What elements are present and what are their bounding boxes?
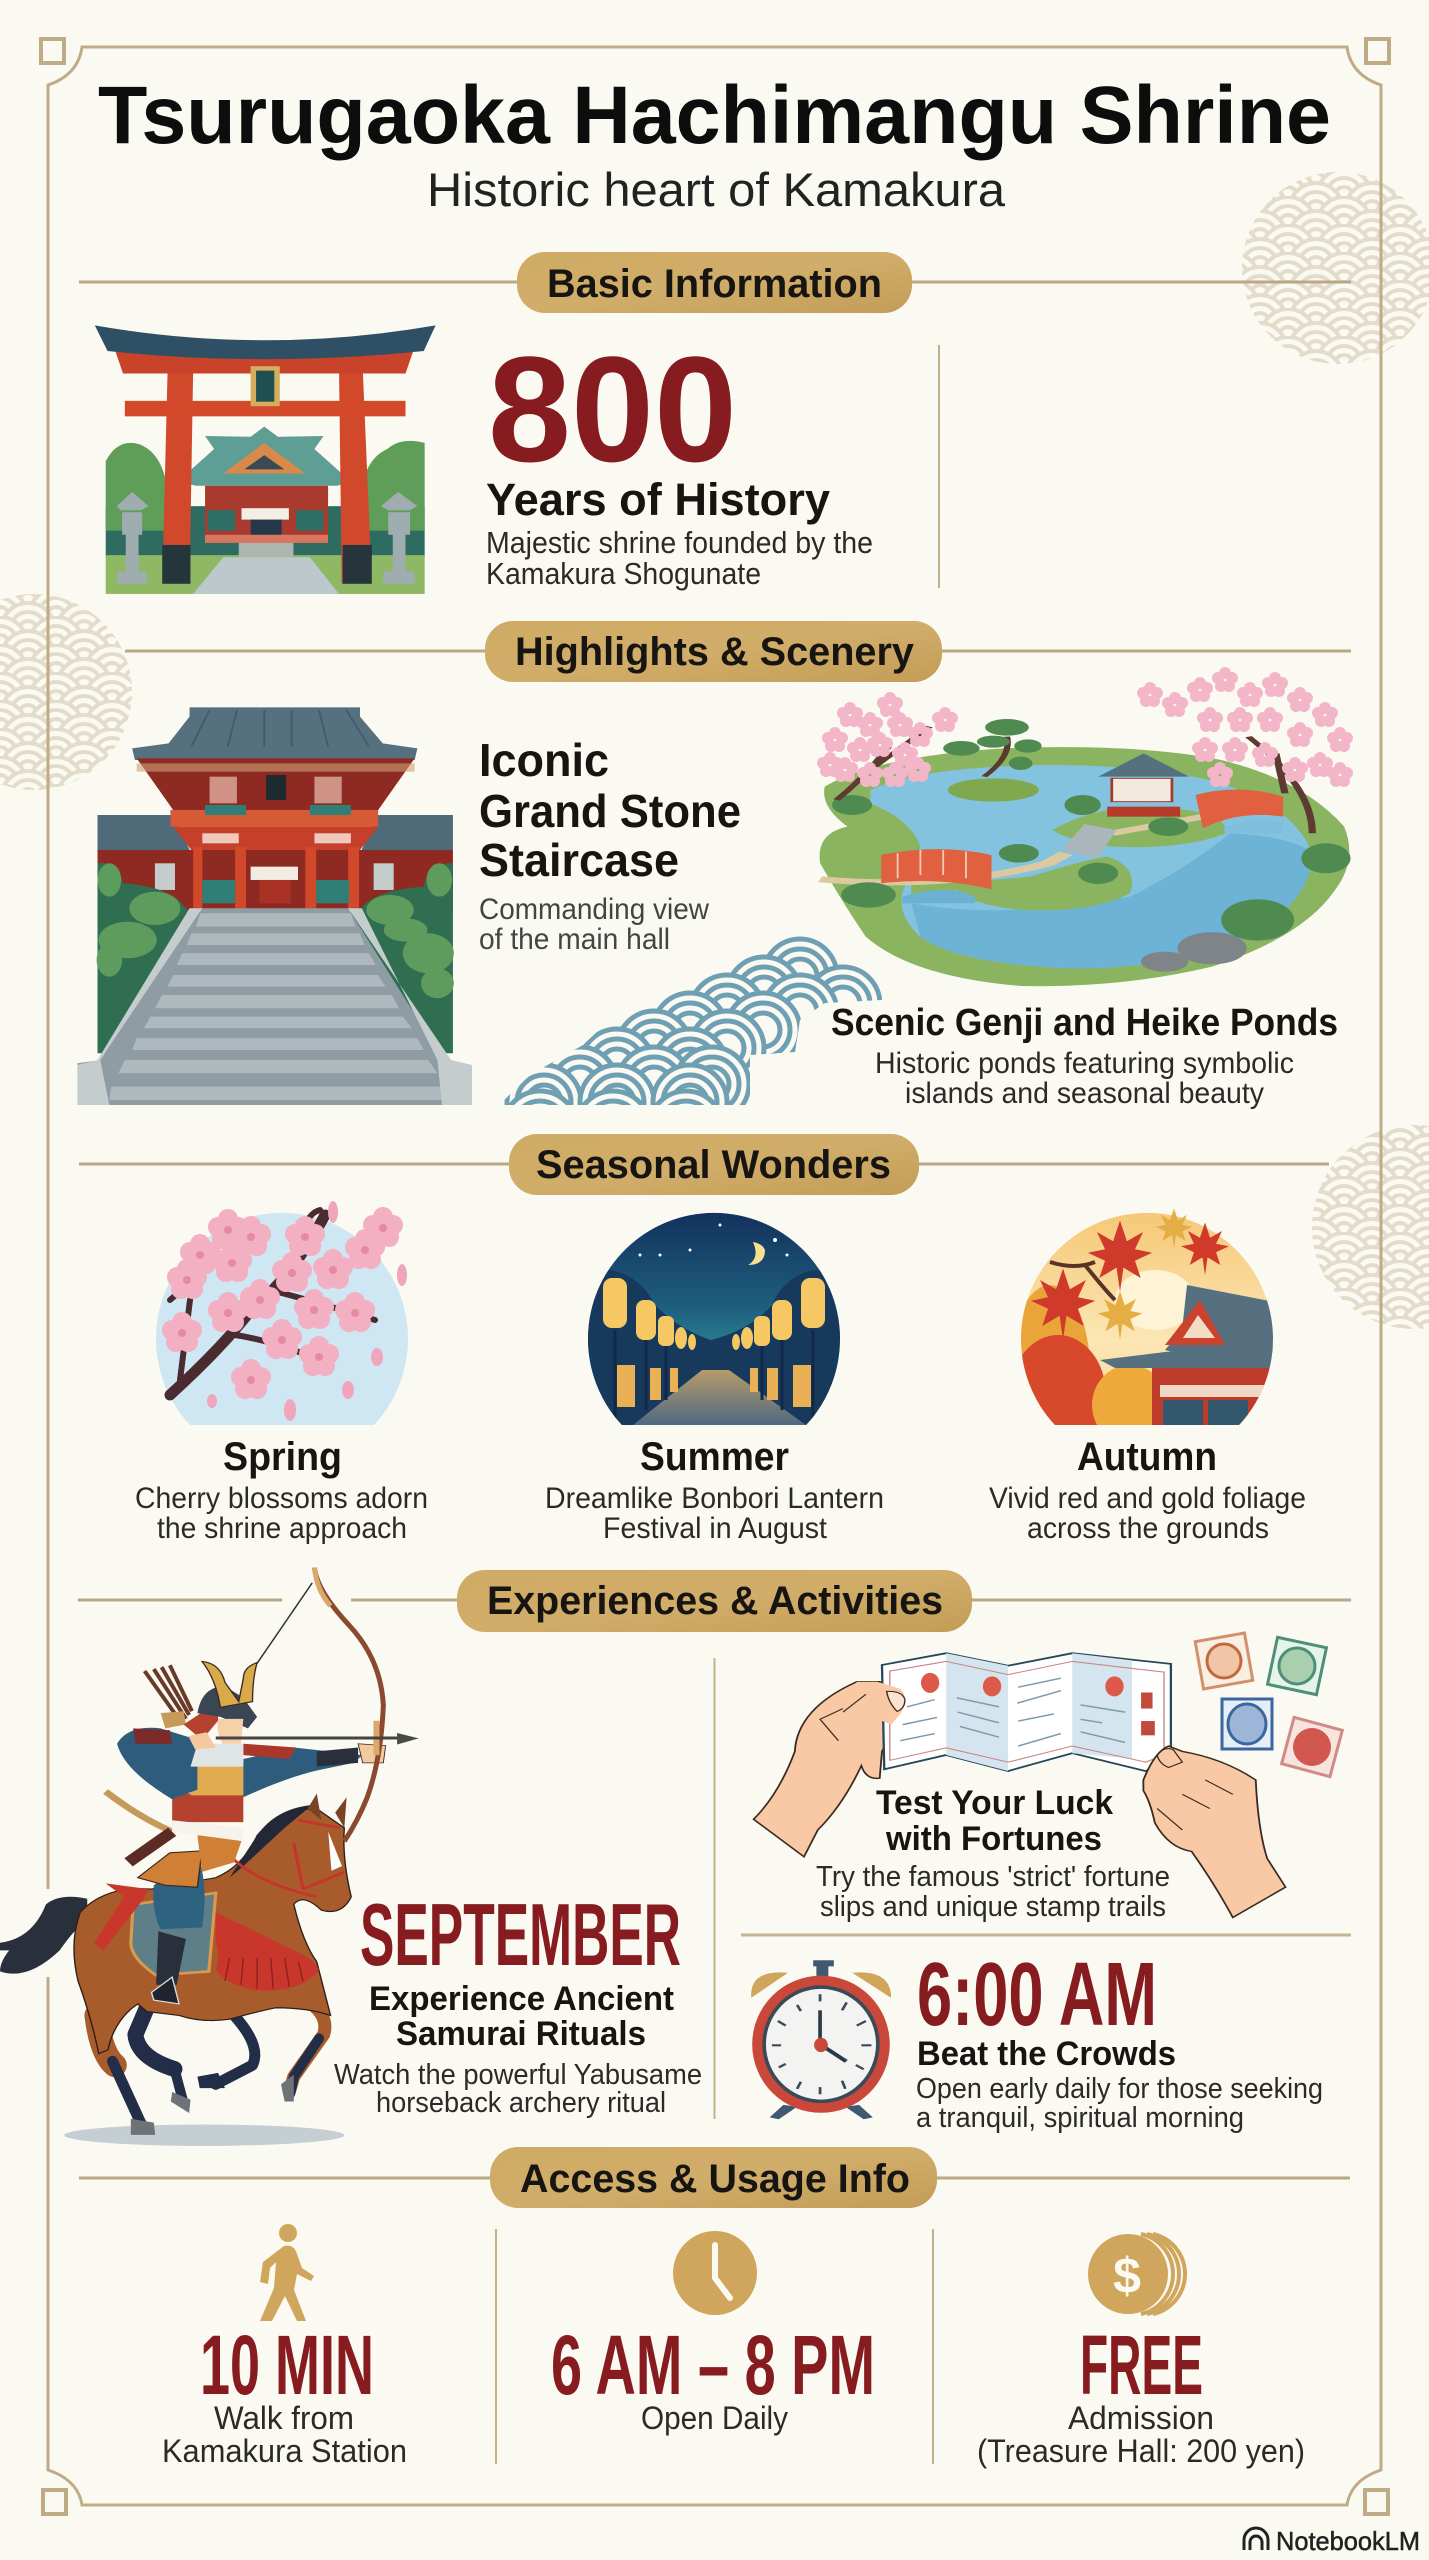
stat: free admission: FREE [1080, 2318, 1203, 2412]
text: season captions: Cherry blossoms adorn [135, 1482, 428, 1515]
stat: September samurai rituals [334, 1885, 702, 2119]
stat: 6:00 AM beat the crowds: Open early daily for those seeking [916, 2073, 1323, 2105]
section header: Highlights & Scenery [125, 621, 1351, 682]
text: Test Your Luck with Fortunes: with Fortunes [885, 1820, 1102, 1858]
pattern: top right seigaiha [1242, 172, 1429, 364]
stat: 800 years of history: 800 [488, 325, 737, 493]
text: Scenic Genji and Heike Ponds: Historic ponds featuring symbolic [875, 1047, 1294, 1080]
access item divider [932, 2229, 934, 2464]
section header: Experiences & Activities: Experiences & Activities [487, 1579, 943, 1623]
text: season captions [135, 1435, 1306, 1545]
stat: free admission [977, 2318, 1305, 2469]
icon: stamps [1195, 1633, 1342, 1777]
section header: Access & Usage Info: Access & Usage Info [520, 2157, 910, 2201]
stat: 10 min walk: 10 MIN [200, 2318, 374, 2412]
text: season captions: Spring [223, 1435, 342, 1479]
illustration: main hall and grand stone staircase [77, 707, 472, 1105]
stat: 6:00 AM beat the crowds [916, 1945, 1323, 2134]
text: season captions: across the grounds [1027, 1512, 1269, 1545]
logo: NotebookLM: NotebookLM [1276, 2526, 1420, 2556]
illustration: Genji and Heike ponds [817, 667, 1353, 986]
section header: Seasonal Wonders: Seasonal Wonders [536, 1143, 891, 1187]
stat: 6:00 AM beat the crowds: a tranquil, spiritual morning [916, 2102, 1244, 2134]
text: Iconic Grand Stone Staircase [479, 734, 741, 956]
text: Iconic Grand Stone Staircase: Commanding view [479, 893, 709, 926]
text: Scenic Genji and Heike Ponds [831, 1002, 1338, 1110]
access item divider [495, 2229, 497, 2464]
text: Test Your Luck with Fortunes: Try the famous 'strict' fortune [816, 1861, 1170, 1893]
stat: 10 min walk: Kamakura Station [162, 2433, 407, 2469]
stat: September samurai rituals: Samurai Rituals [396, 2015, 646, 2053]
icon: clock [673, 2231, 757, 2315]
text: season captions: Autumn [1077, 1435, 1217, 1479]
icon: alarm clock [751, 1960, 891, 2119]
stat: free admission: (Treasure Hall: 200 yen) [977, 2433, 1305, 2469]
text: Test Your Luck with Fortunes: slips and unique stamp trails [820, 1891, 1166, 1923]
illustration: samurai archer on horseback [0, 1568, 419, 2146]
title: Tsurugaoka Hachimangu Shrine [98, 70, 1331, 161]
stat: September samurai rituals: SEPTEMBER [360, 1885, 681, 1984]
frame gap behind horse tail [40, 1889, 60, 1977]
text: Scenic Genji and Heike Ponds: Scenic Genji and Heike Ponds [831, 1002, 1338, 1044]
pattern: left seigaiha [0, 594, 132, 790]
stat: free admission: Admission [1068, 2400, 1214, 2436]
illustration: hands holding fortune slip [754, 1653, 1286, 1917]
stat: opening hours: 6 AM – 8 PM [551, 2318, 875, 2412]
stat: 6:00 AM beat the crowds: Beat the Crowds [917, 2035, 1176, 2073]
stat: September samurai rituals: horseback archery ritual [376, 2087, 666, 2119]
icon: coins [1088, 2234, 1185, 2314]
illustration: torii gate and shrine [95, 325, 436, 594]
text: Iconic Grand Stone Staircase: Grand Stone [479, 785, 741, 837]
text: Iconic Grand Stone Staircase: Iconic [479, 734, 609, 786]
section header: Seasonal Wonders [79, 1134, 1329, 1195]
text: season captions: Dreamlike Bonbori Lantern [545, 1482, 884, 1515]
stat: September samurai rituals: Experience Ancient [369, 1980, 674, 2018]
illustration: autumn foliage and roof [1021, 1208, 1273, 1425]
section header: Experiences & Activities [78, 1570, 1351, 1632]
pattern: blue seigaiha waves [504, 936, 882, 1105]
section header: Highlights & Scenery: Highlights & Scenery [515, 630, 915, 674]
stat: 800 years of history: Majestic shrine founded by the [486, 525, 873, 560]
stat: September samurai rituals: Watch the powerful Yabusame [334, 2059, 702, 2091]
text: season captions: Summer [640, 1435, 789, 1479]
text: Test Your Luck with Fortunes: Test Your Luck [876, 1784, 1113, 1822]
subtitle: Historic heart of Kamakura [427, 163, 1006, 216]
section header: Basic Information [79, 252, 1351, 313]
illustration: summer lantern festival [585, 1210, 845, 1430]
stat: opening hours: Open Daily [641, 2400, 788, 2436]
stat: 800 years of history [486, 325, 873, 591]
text: Iconic Grand Stone Staircase: of the main hall [479, 923, 670, 956]
text: season captions: Vivid red and gold foliage [989, 1482, 1306, 1515]
illustration: spring cherry blossoms [156, 1201, 408, 1425]
icon: coins: $ [1113, 2248, 1141, 2304]
text: Scenic Genji and Heike Ponds: islands and seasonal beauty [905, 1077, 1264, 1110]
stat: 800 years of history: Years of History [486, 474, 830, 525]
stat: opening hours [551, 2318, 875, 2436]
text: season captions: Festival in August [603, 1512, 828, 1545]
text: Test Your Luck with Fortunes [816, 1784, 1170, 1923]
icon: walking person [260, 2224, 314, 2321]
stat: 6:00 AM beat the crowds: 6:00 AM [917, 1945, 1157, 2045]
section header: Access & Usage Info [79, 2147, 1350, 2208]
stat: 10 min walk: Walk from [214, 2400, 354, 2436]
text: Iconic Grand Stone Staircase: Staircase [479, 834, 679, 886]
text: season captions: the shrine approach [157, 1512, 407, 1545]
pattern: right seigaiha [1312, 1125, 1429, 1329]
section header: Basic Information: Basic Information [547, 262, 882, 306]
stat: 800 years of history: Kamakura Shogunate [486, 556, 761, 591]
stat: 10 min walk [162, 2318, 407, 2469]
